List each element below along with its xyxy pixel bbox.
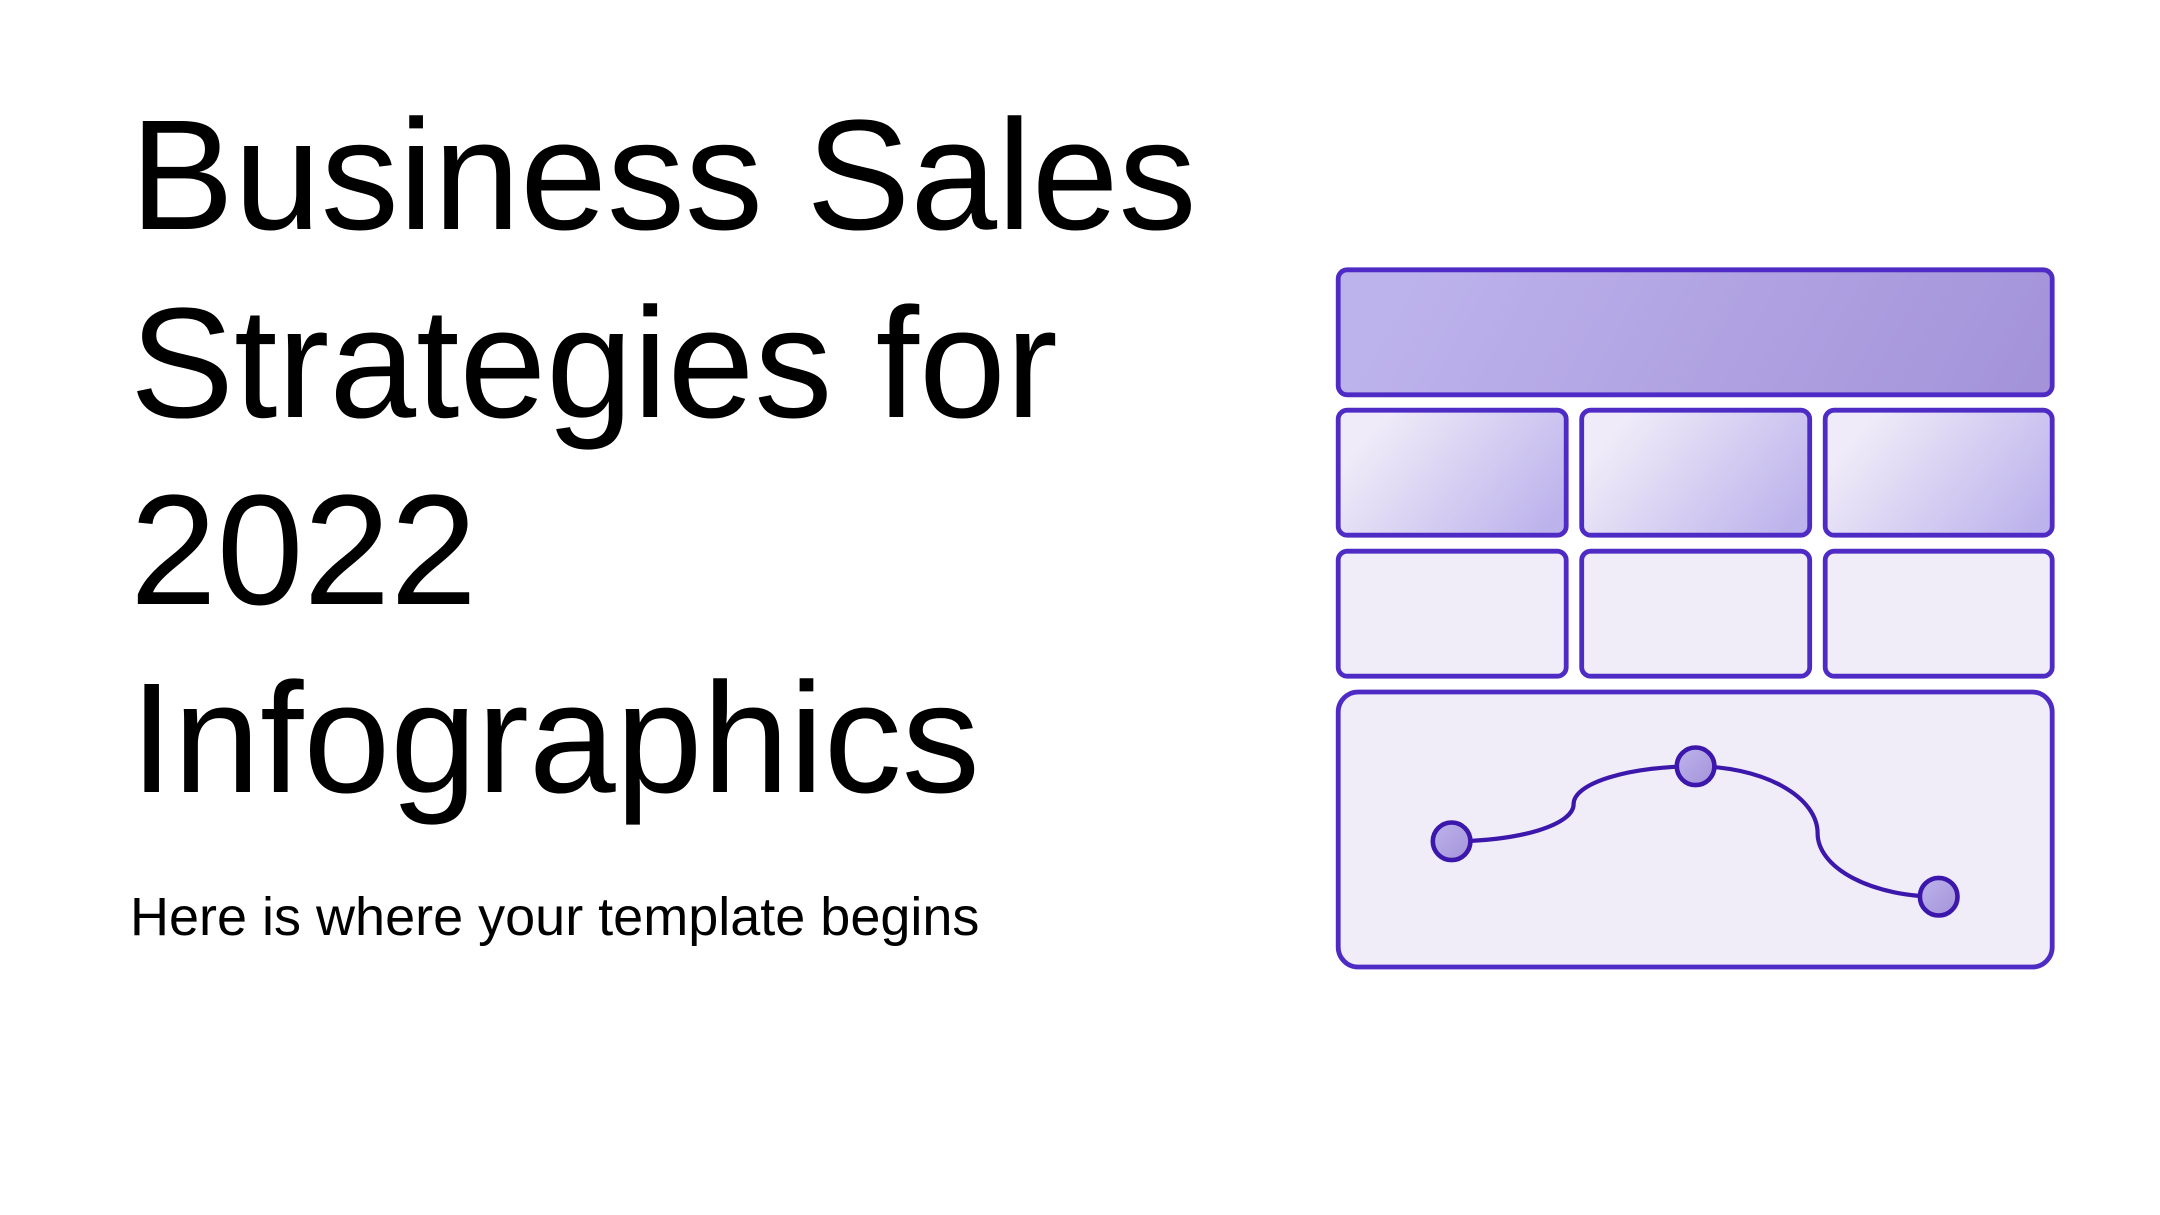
title: Business Sales [130,88,1197,263]
header bar [1338,270,2052,395]
chart panel [1338,692,2052,967]
title: Strategies for [130,276,1058,451]
subtitle: Here is where your template begins [130,887,979,947]
row 3 cell 2 [1582,551,1810,676]
row 3 cell 3 [1825,551,2052,676]
title [130,88,1197,826]
row 3 cell 1 [1338,551,1566,676]
title: Infographics [130,651,980,826]
row 2 cell 2 [1582,410,1810,535]
row 2 cell 3 [1825,410,2052,535]
line chart with three points [1433,748,1957,916]
row 2 cell 1 [1338,410,1566,535]
title: 2022 [130,463,477,638]
